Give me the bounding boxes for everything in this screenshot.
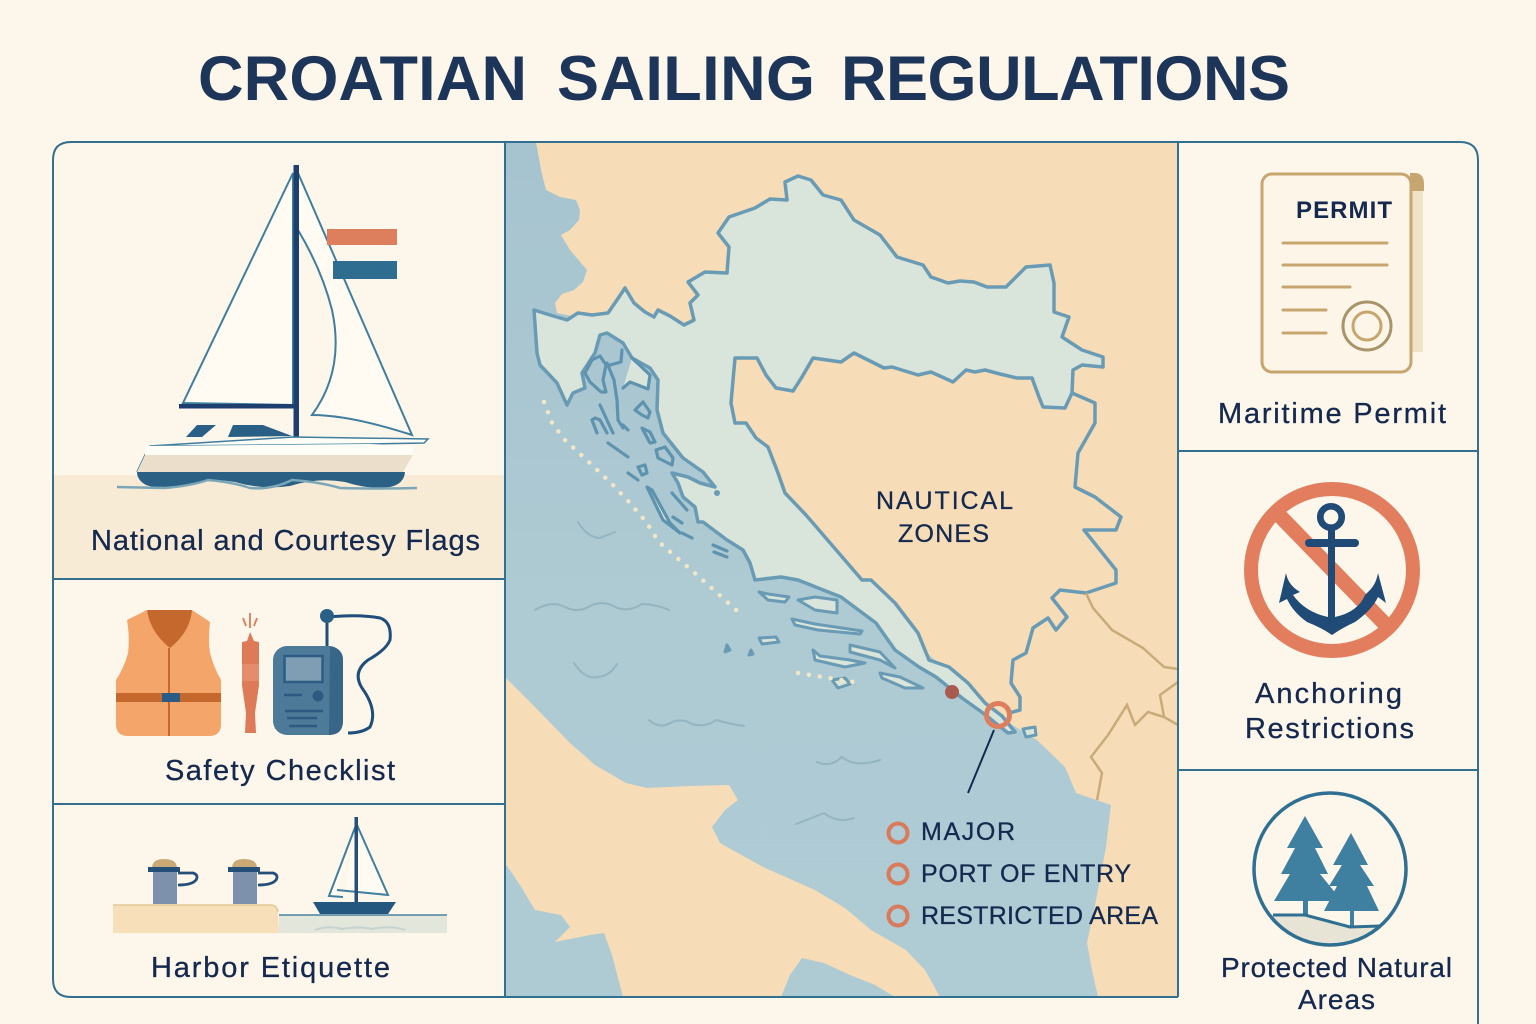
city dot	[945, 685, 959, 699]
title: SAILING	[557, 44, 815, 114]
legend item: restricted area: RESTRICTED AREA	[921, 902, 1158, 930]
wave marks	[535, 522, 880, 824]
panel: maritime permit	[1218, 173, 1446, 430]
icon: permit document	[1262, 173, 1424, 372]
panel: national and courtesy flags	[54, 165, 504, 579]
caption: Restrictions	[1245, 713, 1414, 745]
map label: nautical zones: ZONES	[898, 520, 989, 548]
legend	[888, 818, 1158, 930]
southern islands	[716, 492, 1036, 737]
icon: dock with bollards	[113, 859, 279, 933]
map label: nautical zones: NAUTICAL	[876, 487, 1013, 515]
caption: Maritime Permit	[1218, 398, 1446, 430]
icon: life vest	[116, 610, 221, 736]
caption: Harbor Etiquette	[151, 952, 390, 984]
panel: protected natural areas	[1221, 793, 1452, 1015]
port marker with leader line	[968, 704, 1010, 793]
inland tan borders	[1086, 593, 1178, 800]
icon: national flag	[327, 229, 397, 279]
panel: anchoring restrictions	[1245, 489, 1414, 745]
caption: Anchoring	[1255, 678, 1402, 710]
icon: permit document: PERMIT	[1296, 197, 1392, 224]
sand band	[54, 475, 504, 579]
icon: no anchoring	[1251, 489, 1413, 651]
icon: small sailboat	[313, 817, 396, 914]
islands	[585, 350, 727, 557]
icon: water	[279, 915, 447, 933]
title: REGULATIONS	[841, 44, 1290, 114]
legend item: major: MAJOR	[921, 818, 1015, 846]
panel: safety checklist	[116, 609, 395, 787]
panel: harbor etiquette	[113, 817, 447, 984]
Bosnia border	[1009, 393, 1121, 713]
caption: Protected Natural	[1221, 952, 1452, 983]
icon: radio	[273, 609, 390, 735]
legend item: major	[886, 822, 1014, 844]
Croatia territory	[534, 176, 1103, 733]
icon: trees in circle	[1254, 793, 1406, 950]
title	[198, 44, 1290, 114]
frame and dividers	[53, 142, 1478, 1024]
panel: map of nautical zones	[505, 143, 1178, 997]
icon: sailboat	[117, 165, 428, 488]
caption: National and Courtesy Flags	[91, 525, 480, 557]
sea	[505, 143, 1111, 997]
dotted nautical boundary	[544, 402, 854, 682]
caption: Safety Checklist	[165, 755, 395, 787]
legend item: port of entry: PORT OF ENTRY	[921, 860, 1131, 888]
map label: nautical zones	[878, 491, 1012, 542]
caption	[1221, 952, 1452, 1015]
caption: Areas	[1298, 984, 1375, 1015]
land background	[505, 143, 1178, 997]
icon: flare	[242, 613, 259, 733]
title: CROATIAN	[198, 44, 527, 114]
caption	[1245, 678, 1414, 745]
sea: southern bays	[505, 863, 895, 997]
